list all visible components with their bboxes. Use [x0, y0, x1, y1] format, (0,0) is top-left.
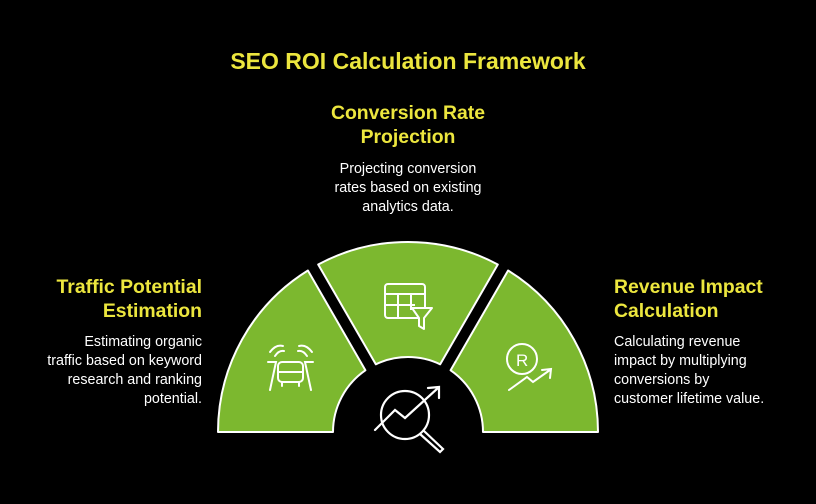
text: traffic description: research and ranking [68, 372, 202, 388]
heading: conversion rate projection: Conversion Rate [331, 102, 485, 124]
segment: revenue [451, 270, 598, 432]
icon: table filter [385, 284, 432, 329]
heading: traffic potential: Traffic Potential [57, 276, 202, 298]
text: traffic description: traffic based on keyword [47, 353, 202, 369]
icon: car traffic [268, 346, 313, 390]
text: traffic description [47, 334, 202, 407]
text: conversion description: Projecting conversion [340, 161, 476, 177]
segment: conversion [318, 242, 498, 364]
segment: traffic [218, 270, 365, 432]
title: SEO ROI Calculation Framework [230, 48, 586, 74]
heading: conversion rate projection: Projection [361, 126, 455, 148]
heading: traffic potential: Estimation [103, 300, 202, 322]
heading: revenue impact: Calculation [614, 300, 719, 322]
heading: revenue impact: Revenue Impact [614, 276, 763, 298]
icon: search analytics [375, 387, 443, 452]
text: conversion description [334, 161, 482, 215]
text: revenue description: conversions by [614, 372, 709, 388]
text: traffic description: potential. [144, 391, 202, 407]
text: conversion description: rates based on existing [334, 180, 482, 196]
heading: traffic potential [56, 276, 202, 322]
text: revenue description: Calculating revenue [614, 334, 740, 350]
icon: revenue growth: R [516, 351, 528, 370]
text: revenue description: impact by multiplying [614, 353, 747, 369]
text: conversion description: analytics data. [362, 199, 454, 215]
heading: revenue impact [614, 276, 763, 322]
text: revenue description [614, 334, 764, 407]
text: traffic description: Estimating organic [84, 334, 202, 350]
text: revenue description: customer lifetime value. [614, 391, 764, 407]
heading: conversion rate projection [331, 102, 485, 148]
icon: revenue growth [507, 344, 551, 390]
